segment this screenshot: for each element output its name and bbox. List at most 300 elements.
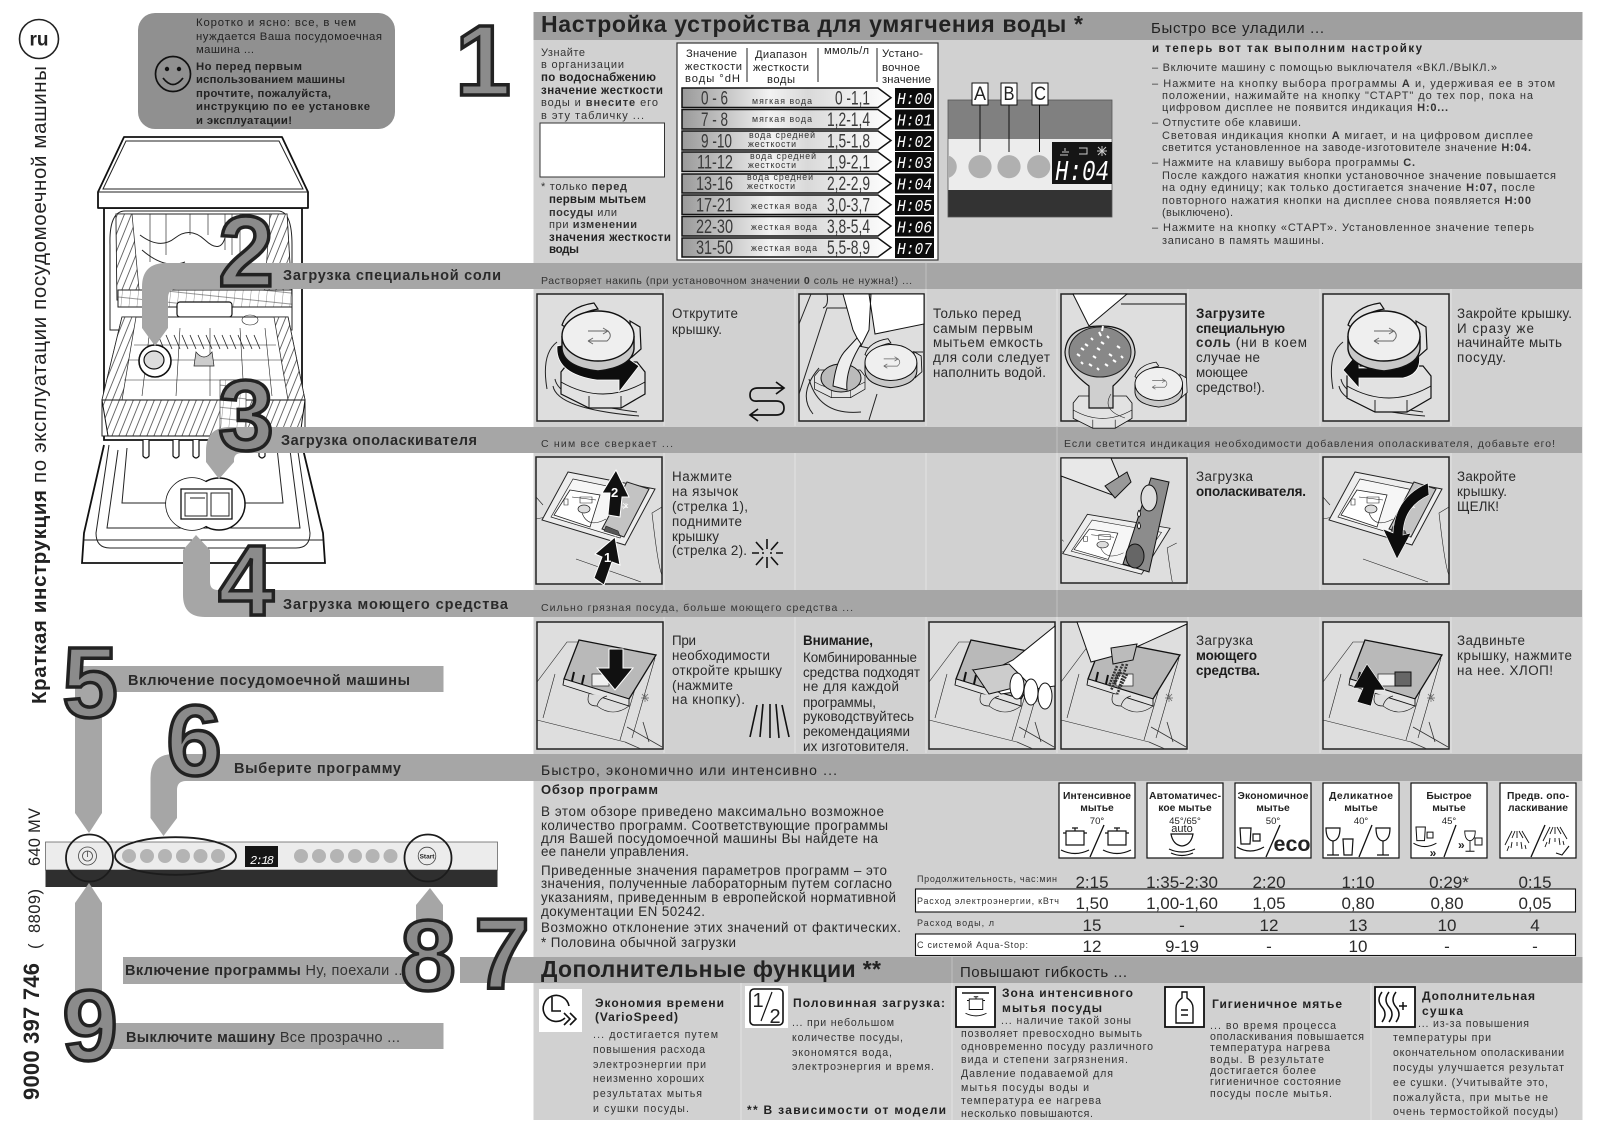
table: water hardness: жесткая вода [751,222,817,232]
programme: quick: Быстрое [1426,791,1472,802]
programme: delicate: 40° [1354,816,1368,827]
connector 9 [75,883,102,1000]
feature: vario speed: повышения расхода [593,1044,705,1056]
text: press tab: поднимите [672,514,742,529]
step numbers: 2 [218,196,274,308]
table: programme values: - [1179,916,1185,935]
table: programme values: 1,50 [1075,894,1109,913]
model and document number [19,808,44,1100]
text block: setup steps: повторного нажатия кнопки на дисплее снова появляется H:00 [1162,195,1531,207]
feature: intensive zone: мытья посуды воды и [961,1082,1089,1094]
text block: find out hardness: первым мытьем [549,194,646,206]
feature: extra drying: ... из-за повышения [1418,1018,1529,1030]
feature: hygiene: температура нагрева [1210,1042,1330,1054]
table header: значение [882,74,931,86]
text block: setup steps: Световая индикация кнопки А мигает, и на цифровом дисплее [1162,130,1533,142]
programme: pre-rinse: ласкивание [1508,803,1568,814]
feature: vario speed: (VarioSpeed) [595,1010,678,1024]
image: open lid [536,457,662,585]
table: programme values: - [1444,937,1450,956]
heading: water softening [541,11,1324,37]
text: close: Закройте крышку. [1457,306,1572,321]
text block: programme overview: В этом обзоре приведено максимально возможное [541,804,884,819]
text: unscrew [672,306,738,337]
table: water hardness: жесткая вода [751,243,817,253]
feature: hygiene: воды. В результате [1210,1054,1324,1066]
text block: find out hardness: при изменении [549,219,637,231]
language badge ru [20,20,58,58]
table: programme values: 9-19 [1165,937,1199,956]
text block: programme overview: указаниям, приведенным в европейской нормативной [541,890,896,905]
feature: intensive zone: Зона интенсивного [1002,986,1133,1000]
table header: ммоль/л [824,45,869,57]
icon: spray lines [750,704,789,738]
programme: eco: мытье [1256,803,1290,814]
table header: жесткости [753,62,809,74]
text block: find out hardness: воды [549,244,579,256]
step numbers [62,5,530,1082]
text: slide lid: крышку, нажмите [1457,648,1572,663]
table: programme values: 0,80 [1430,894,1464,913]
text block: find out hardness: посуды или [549,207,617,219]
display 2:18: 2:18 [250,854,274,868]
table: water hardness: H:06 [897,220,932,238]
callout: smiley note: Коротко и ясно: все, в чем [196,17,356,29]
text block: find out hardness: в эту табличку ... [541,110,644,122]
text: warning combined: средства подходят [803,665,920,680]
table: programme values: 1:10 [1341,873,1375,892]
programme: auto [1147,783,1223,858]
table: water hardness: H:02 [897,134,932,153]
panel: control panel [46,842,498,887]
band labels left: Включение посудомоечной машины [128,673,410,689]
text: water note: наполнить водой. [933,365,1046,380]
text: open lid: на кнопку). [672,692,745,707]
dividers in bands [926,263,1057,983]
text: rinse aid [1196,469,1306,499]
table: water hardness: H:01 [897,112,932,132]
arrow 1 [594,537,620,585]
icon: one half [745,986,788,1028]
programme: intensive: 70° [1090,816,1104,827]
feature: extra drying [1375,987,1564,1118]
image: hand with tablet [929,622,1055,749]
step numbers: 3 [218,360,274,472]
table: water hardness: 31-50 [696,238,733,259]
feature: extra drying: очень термостойкой посуды) [1393,1106,1558,1118]
band captions: Если светится индикация необходимости добавления ополаскивателя, добавьте его! [1064,438,1555,450]
band labels left [125,268,509,1046]
text: close: начинайте мыть [1457,335,1562,350]
text block: programme overview: Обзор программ [541,782,658,797]
panel: right background [534,12,1582,1120]
language badge ru: ru [30,30,48,50]
text block: setup steps: – Нажмите на клавишу выбора программы С. [1152,157,1415,169]
feature: extra drying: сушка [1422,1004,1463,1018]
table: water hardness: 0 -1,1 [835,88,870,110]
step numbers: 7 [474,898,530,1010]
text: slide lid: Задвиньте [1457,633,1525,648]
feature: vario speed: ... достигается путем [593,1029,718,1041]
heading: water softening: Настройка устройства для умягчения воды * [541,11,1083,37]
step numbers: 4 [218,525,274,637]
feature: vario speed: результатах мытья [593,1088,702,1100]
table: water hardness: 3,8-5,4 [827,217,870,238]
image: funnel [1061,294,1187,428]
illustration: buttons A B C [948,83,1112,217]
step numbers: 6 [166,685,222,797]
text block: programme overview: Приведенные значения параметров программ – это [541,863,887,878]
band labels left: Загрузка моющего средства [283,597,509,613]
text: water note [933,306,1050,380]
image: open lid: 2 [611,485,618,500]
panel: salt row [537,294,1572,428]
icon: sparkle [752,539,783,568]
band captions: Растворяет накипь (при установочном значении 0 соль не нужна!) ... [541,275,912,287]
image: pour detergent [1061,622,1187,749]
icon: bottle [1165,987,1204,1027]
step numbers: 9 [62,970,118,1082]
table: water hardness: жесткости [748,139,796,149]
text: press tab: на язычок [672,484,738,499]
heading: water softening: Быстро все уладили ... [1151,20,1324,37]
table: programme values: 1:35-2:30 [1146,873,1218,892]
programme: quick: » [1430,846,1437,860]
band captions: Быстро, экономично или интенсивно ... [541,762,837,778]
text: water note: мытьем емкость [933,335,1043,350]
programme: quick: » [1458,838,1465,852]
table: programme values: С системой Aqua-Stop: [917,940,1028,950]
table: programme values [916,873,1576,956]
programme: pre-rinse: Предв. опо- [1507,791,1570,802]
feature: hygiene: гигиеничное состояние [1210,1076,1341,1088]
table header: воды °dH [685,73,740,85]
text: detergent: Загрузка [1196,633,1254,648]
table: water hardness: 22-30 [696,217,733,238]
programme: auto: Автоматичес- [1149,791,1222,802]
feature: hygiene: ... во время процесса [1210,1020,1336,1032]
table: programme values: 0:15 [1518,873,1552,892]
programme: eco: eco [1274,833,1310,856]
band labels left: Загрузка специальной соли [283,268,501,284]
icon: heat waves [1375,987,1415,1027]
table: programme values: 0,05 [1518,894,1552,913]
table: programme values: 0,80 [1341,894,1375,913]
text: unscrew: крышку. [672,322,722,337]
text block: find out hardness: по водоснабжению [541,72,656,84]
programme: eco: Экономичное [1238,791,1309,802]
feature: half load: ... при небольшом [792,1017,894,1029]
text: detergent: средства. [1196,663,1260,678]
text block: find out hardness: Узнайте [541,47,585,59]
feature: vario speed: неизменно хороших [593,1073,705,1085]
side title: brief instructions: Краткая инструкция по эксплуатации посудомоечной машины [28,66,51,704]
text: close click: Закройте [1457,469,1516,484]
text: unscrew: Открутите [672,306,738,321]
table: water hardness: 1,9-2,1 [827,152,870,174]
feature: extra drying: пожалуйста, при мытье не [1393,1092,1548,1104]
connector 3 [206,427,1582,479]
display 2:18 [245,846,278,868]
text block: setup steps: – Отпустите обе клавиши. [1152,117,1301,129]
programme: intensive [1059,783,1135,858]
text: load salt [1196,306,1307,395]
text: water note: для соли следует [933,350,1050,365]
text: load salt: Загрузите [1196,306,1265,321]
table: water hardness: жесткости [747,181,795,191]
connector 5 [75,666,444,833]
programme: delicate: мытье [1344,803,1378,814]
text block: setup steps: – Нажмите на кнопку выбора программы А и, удерживая ее в этом [1152,78,1555,90]
programme: delicate: Деликатное [1329,791,1393,802]
table: water hardness: 5,5-8,9 [827,238,870,259]
table: water hardness: 7 - 8 [701,110,728,131]
text block: setup steps: светится установленное на заводе-изготовителе значение H:04. [1162,142,1531,154]
heading: additional functions [541,956,1127,982]
image: fill water [799,294,924,421]
model and document number: 640 MV [26,808,44,866]
feature: hygiene: посуды после мытья. [1210,1088,1332,1100]
text: load salt: моющее [1196,365,1248,380]
band labels left: Загрузка ополаскивателя [281,433,477,449]
step numbers: 5 [62,627,118,739]
text block: setup steps: После каждого нажатия кнопки установочное значение повышается [1162,170,1556,182]
icon: zone [956,987,995,1027]
illustration: buttons A B C: B [1004,84,1014,105]
table: programme values: Продолжительность, час:мин [917,874,1057,884]
band labels left: Выключите машину Все прозрачно ... [126,1030,400,1046]
feature: vario speed: и сушки посуды. [593,1103,689,1115]
image: pour rinse aid [1060,457,1188,584]
text: close [1457,306,1572,365]
feature: hygiene: Гигиеничное мятье [1212,997,1342,1011]
dishwasher worktop [98,137,308,208]
text: close click [1457,469,1516,514]
text: open lid [672,633,782,707]
table: water hardness: 9 -10 [701,132,732,152]
feature: half load [745,986,946,1117]
table header: Устано- [882,48,923,60]
step numbers: 1 [455,5,511,117]
feature: hygiene: ополаскивания повышается [1210,1031,1364,1043]
table header: Диапазон [755,49,807,61]
image: close lid [1323,457,1449,584]
table: water hardness: 13-16 [696,174,733,195]
text: rinse aid: Загрузка [1196,469,1254,484]
table: programme values: 12 [1083,937,1101,956]
programme: quick [1411,783,1487,860]
model and document number: ( 8809) [26,889,44,949]
table: programme values: - [1532,937,1538,956]
feature: intensive zone: позволяет превосходно вымыть [961,1028,1142,1040]
table: water hardness: H:00 [897,91,932,110]
text: load salt: специальную [1196,321,1285,336]
feature: intensive zone: ... наличие такой зоны [1001,1015,1131,1027]
feature: intensive zone: Давление подаваемой для [961,1068,1113,1080]
text: load salt: случае не [1196,350,1260,365]
callout: smiley note: Но перед первым [196,61,302,73]
icon: one half: 2 [769,1006,781,1028]
feature: extra drying: ее сушки. (Учитывайте это, [1393,1077,1548,1089]
illustration: open dishwasher [82,137,325,563]
table: programme values: 2:15 [1075,873,1109,892]
text: open lid: откройте крышку [672,663,782,678]
table: water hardness: 2,2-2,9 [827,174,870,195]
feature: vario speed [539,989,724,1115]
feature: intensive zone: температура ее нагрева [961,1095,1101,1107]
text block: programme overview: для Вашей посудомоечной машины Вы найдете на [541,831,879,846]
programme: auto: auto [1171,823,1193,835]
table: water hardness: жесткости [748,160,796,170]
programme: delicate [1323,783,1399,858]
text: warning combined: руководствуйтесь [803,709,914,724]
text block: programme overview: значения, полученные лабораторным путем согласно [541,876,892,891]
text block: programme overview: * Половина обычной загрузки [541,935,736,950]
table: water hardness: 1,5-1,8 [827,132,870,152]
callout: smiley note [138,13,395,129]
text: slide lid: на нее. ХЛОП! [1457,663,1553,678]
heading: additional functions: Дополнительные функции ** [541,956,881,982]
table: water hardness: 0 - 6 [701,88,728,110]
text block: setup steps: и теперь вот так выполним настройку [1152,43,1423,55]
feature: half load: количестве посуды, [792,1032,903,1044]
table: water hardness: 3,0-3,7 [827,196,870,216]
text block: find out hardness: значения жесткости [549,232,671,244]
text: detergent [1196,633,1260,678]
table: programme values: Расход электроэнергии, кВтч [917,896,1059,906]
programme: quick: 45° [1442,816,1456,827]
text: press tab: Нажмите [672,469,732,484]
table: programme values: 0:29* [1429,873,1469,892]
feature: vario speed: Экономия времени [595,996,724,1010]
table header: Значение [686,48,737,60]
text block: find out hardness: значение жесткости [541,85,663,97]
model and document number: 9000 397 746 [19,963,44,1100]
callout: smiley note: и эксплуатации! [196,115,292,127]
table: programme values: 10 [1349,937,1367,956]
text: open lid: При [672,633,696,648]
table: programme values: 1,00-1,60 [1146,894,1218,913]
arrow 2 [602,470,629,517]
feature: extra drying: посуды улучшается результат [1393,1062,1564,1074]
feature: intensive zone: одновременно посуду различного [961,1041,1153,1053]
feature: half load: ** В зависимости от модели [747,1103,946,1117]
feature: intensive zone: несколько повышаются. [961,1108,1093,1120]
image: open detergent lid [537,622,663,749]
table rows [682,88,891,257]
bar: switch off [100,1023,444,1049]
table: water hardness: вода средней [749,130,815,140]
table: water hardness: 11-12 [697,152,733,174]
table: water hardness: вода средней [750,151,816,161]
table: water hardness: мягкая вода [752,114,812,124]
programme: intensive: Интенсивное [1063,791,1131,802]
callout: smiley note: инструкцию по ее установке [196,101,370,113]
text: warning combined: рекомендациями [803,724,910,739]
icon: start button: Start [420,854,435,860]
image: open lid: 1 [604,550,611,565]
table header: вочное [882,62,920,74]
table: programme values: - [1266,937,1272,956]
feature: hygiene [1165,987,1364,1100]
feature: intensive zone: вида и степени загрязнения. [961,1054,1128,1066]
text block: setup steps: записано в память машины. [1162,235,1324,247]
text: warning combined: не для каждой [803,679,899,694]
step numbers: 8 [400,900,456,1012]
text block: setup steps: (выключено). [1162,207,1233,219]
icon: start button [418,847,436,865]
text: warning combined [803,633,920,754]
display H:04: H:04 [1055,156,1109,189]
text: close: посуду. [1457,350,1506,365]
feature: extra drying: Дополнительная [1422,989,1535,1003]
feature: half load: экономятся вода, [792,1047,892,1059]
icon: smiley [156,56,190,92]
text block: find out hardness: в организации [541,59,624,71]
table: water hardness: жесткая вода [751,201,817,211]
table: programme values: 13 [1349,916,1367,935]
feature: vario speed: электроэнергии при [593,1059,706,1071]
text: press tab [672,469,748,558]
table: water hardness: мягкая вода [752,96,812,106]
text: slide lid [1457,633,1572,678]
band captions: Сильно грязная посуда, больше моющего средства ... [541,602,853,614]
table: programme values: 2:20 [1252,873,1286,892]
text block: setup steps: – Нажмите на кнопку «СТАРТ». Установленное значение теперь [1152,222,1534,234]
band labels left: Выберите программу [234,761,401,777]
text block: find out hardness: воды и внесите его [541,97,658,109]
table: programme values: 15 [1083,916,1101,935]
programme: pre-rinse [1500,783,1576,858]
text block: programme overview: Возможно отклонение этих значений от фактических. [541,920,901,935]
illustration: buttons A B C: A [974,84,986,105]
programme: quick: мытье [1432,803,1466,814]
text: close click: крышку. [1457,484,1507,499]
image: close cap [1323,294,1449,421]
icon: clock [539,989,582,1032]
icon: salt arrows [750,382,784,421]
programme: eco [1235,783,1311,858]
table: water hardness [677,43,938,260]
text: open lid: (нажмите [672,678,733,693]
bar: start [123,957,408,984]
icon: one half: 1 [752,990,764,1012]
programme: intensive: мытье [1080,803,1114,814]
text block: find out hardness [540,47,671,256]
table header [685,45,931,86]
table: water hardness: H:04 [897,176,932,196]
feature: intensive zone: мытья посуды [1002,1001,1102,1015]
callout: smiley note: прочтите, пожалуйста, [196,88,331,100]
image: close detergent lid [1323,622,1449,749]
heading: additional functions: Повышают гибкость ... [960,964,1127,981]
text: load salt: средство!). [1196,380,1265,395]
connector 4 [183,535,1582,617]
text: water note: Только перед [933,306,1021,321]
band captions: С ним все сверкает ... [541,438,673,450]
connector 2 [142,263,1582,346]
text: press tab: крышку [672,529,719,544]
text block: programme overview: ее панели управления. [541,844,689,859]
band captions [541,275,1555,778]
text: press tab: (стрелка 2). [672,543,747,558]
table: water hardness: 17-21 [696,196,733,216]
control panel rings [66,834,452,882]
text: warning combined: Комбинированные [803,650,917,665]
icon: on/off button [78,847,96,865]
display H:04 [1052,142,1112,189]
text block: find out hardness: * только перед [541,181,627,193]
